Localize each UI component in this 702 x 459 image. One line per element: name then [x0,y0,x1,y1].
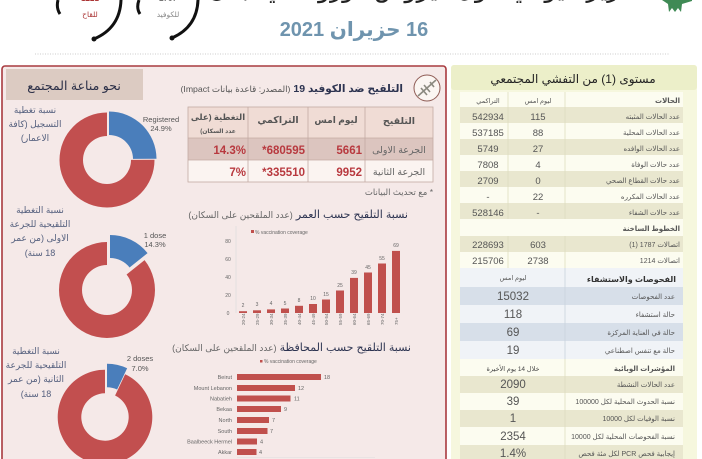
table: vaccination doses [188,107,433,182]
table: cases: - [486,192,490,203]
label: first dose coverage: 18 سنة) [25,248,55,258]
donut: second dose 7% [58,354,153,459]
table: vaccination doses: التلقيح [383,116,415,127]
bar chart: coverage by age group: 65-69 [366,313,371,325]
donut: registered 24.9%: 24.9% [150,124,172,133]
label: second dose coverage [6,346,66,399]
bar chart: coverage by governorate: North [219,418,232,424]
table: vaccination doses: التراكمي [257,115,299,126]
table: cases: 2738 [527,256,549,267]
table: cases: الحالات [655,98,680,105]
table: tests and hospitalisation [460,268,683,359]
table: cases: عدد الحالات الوافده [624,146,680,153]
bar chart: coverage by age group [225,226,400,325]
bar chart: coverage by age group: 4 [270,301,273,307]
table: cases: 88 [533,128,543,139]
table: cases: 115 [530,112,546,123]
bar chart: coverage by governorate: 11 [294,396,300,402]
label: first dose coverage: التلقيحية للجرعة [10,219,70,229]
table: epidemiological indicators: خلال 14 يوم الأخيرة [487,364,539,373]
bar chart: coverage by governorate: % vaccination coverage [264,359,317,365]
bar chart: coverage by age group: 25-29 [255,313,260,325]
bar chart: coverage by governorate: 7 [272,418,275,424]
label: registration coverage: التسجيل (كافة [9,119,61,129]
table: vaccination doses: *680595 [262,145,306,157]
icon: vaccine counter bracket: للقاح [82,10,98,19]
bar chart: coverage by age group: 60-64 [352,313,357,325]
table: epidemiological indicators: عدد الحالات النشطة [617,382,675,389]
table: epidemiological indicators: نسبة الوفيات لكل 10000 [602,415,675,423]
bar chart: coverage by age group: 10 [310,296,316,302]
bar chart: coverage by age group: 2 [242,303,245,309]
note: data update: * مع تحديث البيانات [365,187,434,197]
table: cases: 528146 [472,208,504,219]
bar chart: coverage by age group: 55-59 [338,313,343,325]
table: vaccination doses: ليوم امس [314,115,358,126]
label: registration coverage: الاعمار) [21,133,49,143]
bar chart: coverage by age group: 0 [227,311,230,317]
bar chart: coverage by age group: 39 [351,270,357,276]
table: tests and hospitalisation: حالة استشفاء [636,312,675,319]
table: cases: التراكمي [476,98,500,105]
donut: first dose 14.3%: 1 dose [144,231,166,240]
table: cases: 2709 [477,176,499,187]
table: tests and hospitalisation: حالة في العناية المركزة [607,329,675,337]
bar chart: coverage by governorate: Nabatieh [210,396,232,402]
table: tests and hospitalisation: 19 [507,345,519,357]
bar chart: coverage by age group: 30-34 [269,313,274,325]
bar chart: coverage by governorate: Bekaa [216,407,233,413]
table: epidemiological indicators: المؤشرات الوبائية [614,366,675,373]
table: epidemiological indicators: 39 [507,396,519,408]
table: cases: 5749 [477,144,499,155]
table: cases: عدد الحالات المثبته [626,114,680,121]
bar chart: coverage by governorate: 12 [298,386,304,392]
table: vaccination doses: 7% [229,167,246,179]
bar chart: coverage by age group: 60 [225,257,231,263]
label: second dose coverage: الثانية (من عمر [7,374,64,384]
table: cases: 228693 [472,240,504,251]
donut: second dose 7%: 2 doses [127,354,153,363]
table: cases: 27 [533,144,543,155]
table: tests and hospitalisation: 118 [504,309,522,321]
donut: registered 24.9% [60,112,179,208]
table: cases: 542934 [472,112,504,123]
bar chart: coverage by governorate: Mount Lebanon [194,386,232,392]
heading: towards community immunity [6,69,143,100]
bar chart: coverage by age group: 70-74 [380,313,385,325]
icon: green ministry logo [662,0,692,12]
icon: covid counter bracket: للكوفيد [157,10,179,19]
donut: registered 24.9%: Registered [143,115,179,124]
table: tests and hospitalisation: ليوم امس [500,275,526,282]
bar chart: coverage by governorate: Akkar [218,450,232,456]
bar chart: coverage by age group: 20-24 [241,313,246,325]
bar chart: coverage by age group: 25 [337,283,343,289]
table: cases: 537185 [472,128,504,139]
bar chart: coverage by age group: 69 [393,243,399,249]
table: cases: - [536,208,540,219]
table: cases: ليوم امس [525,98,551,105]
table: vaccination doses: عدد السكان) [200,128,236,135]
panel: community outbreak level [451,65,697,459]
bar chart: coverage by age group: 5 [284,301,287,307]
heading: towards community immunity: نحو مناعة المجتمع [27,79,121,94]
table: cases: 4 [535,160,541,171]
bar chart: coverage by age group: 35-39 [283,313,288,325]
table: vaccination doses: التغطية (على [191,112,245,122]
table: epidemiological indicators: إيجابية فحص PCR لكل مئة فحص [578,450,675,458]
bar chart: coverage by age group: 45-49 [311,313,316,325]
table: cases: 7808 [477,160,499,171]
table: cases: عدد الحالات المحلية [623,130,680,137]
icon: covid counter bracket [138,0,198,40]
table: cases: اتصالات 1214 [640,258,680,265]
bar chart: coverage by age group: 50-54 [324,313,329,325]
icon: vaccine counter bracket [57,0,121,42]
bar chart: coverage by age group: 8 [298,298,301,304]
heading: coverage by age: نسبة التلقيح حسب العمر (عدد الملقحين على السكان) [188,209,408,221]
bar chart: coverage by age group: 80 [225,239,231,245]
icon: vaccine syringe badge [414,75,440,101]
table: cases: 22 [533,192,543,203]
label: first dose coverage: الاولى (من عمر [10,233,69,243]
table: cases: عدد حالات الشفاء [629,210,680,217]
table: tests and hospitalisation: الفحوصات والاستشفاء [587,275,676,284]
bar chart: coverage by governorate: Beirut [218,375,232,381]
label: second dose coverage: نسبة التغطية [12,346,60,356]
donut: first dose 14.3%: 14.3% [144,240,166,249]
table: cases: 603 [530,240,546,251]
table: tests and hospitalisation: 69 [507,327,519,339]
donut: first dose 14.3% [59,231,166,338]
table: cases: 215706 [472,256,504,267]
bar chart: coverage by age group: 20 [225,293,231,299]
table: cases: 0 [535,176,541,187]
table: vaccination doses: 14.3% [213,145,246,157]
table: tests and hospitalisation: 15032 [497,291,529,303]
table: cases: الخطوط الساخنة [623,226,680,233]
bar chart: coverage by governorate: Baalbeeck Hermel [187,440,232,446]
heading: vaccination against covid 19: التلقيح ضد الكوفيد 19 (المصدر: قاعدة بيانات Impact) [180,83,403,95]
table: epidemiological indicators: نسبة الحدوث المحلية لكل 100000 [575,398,675,406]
table: epidemiological indicators: 1 [510,413,516,425]
bar chart: coverage by age group: 75+ [394,317,399,325]
table: vaccination doses: 9952 [336,167,362,179]
bar chart: coverage by governorate: 4 [260,440,263,446]
table: cases [460,92,683,268]
bar chart: coverage by governorate: South [218,429,232,435]
bar chart: coverage by age group: 45 [365,265,371,271]
bar chart: coverage by age group: 40 [225,275,231,281]
table: cases: عدد حالات الوفاة [631,162,680,169]
bar chart: coverage by age group: 15 [323,292,329,298]
table: epidemiological indicators: 2090 [500,379,526,391]
bar chart: coverage by governorate: 7 [270,429,273,435]
label: registration coverage: نسبة تغطية [14,105,56,115]
bar chart: coverage by governorate: 4 [259,450,262,456]
table: vaccination doses: الجرعة الاولى [372,145,426,156]
heading: level 1 community transmission: مستوى (1) من التفشي المجتمعي [490,72,656,87]
table: tests and hospitalisation: عدد الفحوصات [632,294,675,301]
table: vaccination doses: الجرعة الثانية [373,167,425,178]
table: epidemiological indicators: نسبة الفحوصات المحلية لكل 10000 [571,433,675,441]
bar chart: coverage by age group: % vaccination coverage [255,230,308,236]
table: tests and hospitalisation: حالة مع تنفس اصطناعي [605,348,675,355]
bar chart: coverage by age group: 3 [256,302,259,308]
donut: second dose 7%: 7.0% [131,364,149,373]
table: epidemiological indicators [460,359,683,459]
label: first dose coverage: نسبة التغطية [16,205,64,215]
label: registration coverage [9,105,61,143]
heading: coverage by governorate: نسبة التلقيح حسب المحافظة (عدد الملقحين على السكان) [172,342,411,354]
table: cases: عدد الحالات المكرره [621,193,680,201]
bar chart: coverage by governorate: 9 [284,407,287,413]
panel: vaccination [2,66,446,459]
bar chart: coverage by governorate: 18 [324,375,330,381]
date heading: 16 حزيران 2021 [280,19,428,41]
label: first dose coverage [10,205,70,258]
table: vaccination doses: 5661 [336,145,363,157]
bar chart: coverage by age group: 55 [379,256,385,262]
table: cases: اتصالات 1787 (1) [629,242,680,249]
bar chart: coverage by governorate [187,359,375,458]
table: vaccination doses: *335510 [262,167,305,179]
label: second dose coverage: التلقيحية للجرعة [6,360,66,370]
table: cases: عدد حالات القطاع الصحي [606,178,680,185]
bar chart: coverage by age group: 40-44 [297,313,302,325]
label: second dose coverage: 18 سنة) [21,389,51,399]
table: epidemiological indicators: 2354 [500,431,526,443]
